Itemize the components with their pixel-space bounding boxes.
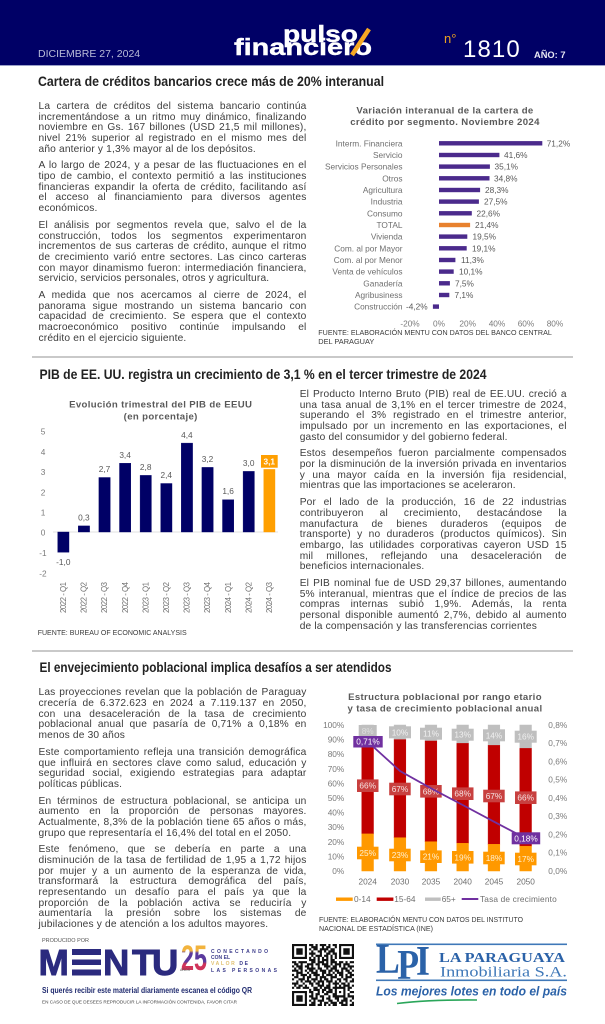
- left axis: 20%: [328, 837, 345, 847]
- chart title: [69, 400, 252, 422]
- value labels: -1,0: [56, 557, 71, 567]
- footer: La Paraguaya Inmobiliaria logo: Los mejores lotes en todo el país: [376, 984, 567, 998]
- right axis: 0,7%: [548, 738, 568, 748]
- 15-64 labels: 67%: [392, 784, 409, 794]
- value labels: 0,3: [78, 512, 90, 522]
- value labels: 27,5%: [484, 197, 508, 207]
- y axis: [39, 427, 47, 578]
- highlighted label: 3,1: [264, 456, 275, 466]
- quarter labels: 2022 - Q1: [59, 582, 68, 613]
- chart title: crédito por segmento. Noviembre 2024: [350, 117, 540, 128]
- 0-14 labels: 21%: [423, 852, 440, 862]
- left axis: 30%: [328, 822, 345, 832]
- left axis: 10%: [328, 851, 345, 861]
- footer: La Paraguaya Inmobiliaria logo: Inmobiliaria S.A.: [440, 965, 567, 981]
- logo: pulso financiero: financiero: [234, 34, 372, 60]
- chart title: Estructura poblacional por rango etario: [348, 692, 542, 703]
- source: [318, 328, 552, 346]
- footer: La Paraguaya Inmobiliaria logo: LA PARAGUAYA: [439, 951, 566, 966]
- tagline: VALOR DE: [211, 961, 249, 967]
- quarter labels: 2023 - Q3: [183, 582, 192, 613]
- category labels: Com. al por Mayor: [334, 243, 403, 253]
- 65+ labels: 11%: [423, 729, 440, 739]
- right axis: 0,1%: [548, 848, 568, 858]
- text block: envejecimiento poblacional: que influirá en sectores clave como salud, educación y: [38, 758, 306, 769]
- text block: envejecimiento poblacional: poblacional anual que pasaría de 0,71% a 0,18% en: [38, 719, 306, 730]
- text block: PIB EEUU: El PIB nominal fue de USD 29,37 billones, aumentando: [300, 578, 567, 589]
- value labels: 4,4: [181, 430, 193, 440]
- category labels: Venta de vehículos: [332, 267, 402, 277]
- text block: cartera de créditos: El análisis por segmentos revela que, salvo el de la: [38, 220, 306, 231]
- growth labels: 0,18%: [514, 833, 538, 843]
- text block: envejecimiento poblacional: Actualmente, 8,3% de la población tiene 65 años o más,: [38, 817, 306, 828]
- y axis: -1: [39, 548, 47, 558]
- 65+ labels: 16%: [517, 732, 535, 742]
- category labels: TOTAL: [377, 220, 403, 230]
- source: NACIONAL DE ESTADÍSTICA (INE): [319, 924, 433, 933]
- text block: envejecimiento poblacional: crecería de 6.372.623 en 2024 a 7.119.137 en 2050,: [38, 698, 306, 709]
- value labels: 41,6%: [504, 150, 528, 160]
- value labels: 3,0: [243, 458, 255, 468]
- source: [319, 915, 523, 933]
- text block: PIB EEUU: compras internas subió 1,9%. Además, la renta: [300, 599, 567, 610]
- quarter labels: 2024 - Q3: [265, 582, 274, 613]
- category labels: Otros: [382, 173, 402, 183]
- right axis: 0,3%: [548, 811, 568, 821]
- legend: Tasa de crecimiento: [480, 894, 557, 904]
- legend: 0-14: [354, 894, 371, 904]
- text block: cartera de créditos: tipo de cambio, el contexto permitió a las instituciones: [38, 171, 306, 182]
- category labels: [325, 138, 403, 312]
- text block: envejecimiento poblacional: disminución de la tasa de fertilidad de 1,95 a 1,72 hijos: [38, 855, 306, 866]
- chart title: Evolución trimestral del PIB de EEUU: [69, 400, 252, 410]
- value labels: 21,4%: [475, 220, 499, 230]
- text block: envejecimiento poblacional: Este comportamiento refleja una transición demográfica: [38, 747, 306, 758]
- bars: [58, 443, 275, 552]
- source: FUENTE: BUREAU OF ECONOMIC ANALYSIS: [38, 628, 187, 637]
- text block: envejecimiento poblacional: jubilaciones y de atención a los adultos mayores.: [38, 919, 268, 930]
- left axis: 40%: [328, 808, 345, 818]
- 65+ labels: [359, 725, 537, 743]
- 15-64 labels: [357, 779, 536, 804]
- quarter labels: 2022 - Q4: [121, 581, 130, 613]
- value labels: 2,8: [140, 462, 152, 472]
- value labels: [56, 430, 255, 567]
- 65+ labels: 14%: [486, 730, 503, 740]
- value axis: 60%: [518, 318, 535, 328]
- text block: PIB EEUU: y una mayor caída en la inversión fija residencial,: [300, 470, 567, 481]
- category labels: Interm. Financiera: [336, 138, 403, 148]
- quarter labels: [59, 581, 274, 613]
- text block: PIB EEUU: por la disminución de la inversión privada en inventarios: [300, 459, 567, 470]
- text block: envejecimiento poblacional: Este fenómeno, que se debería en parte a una: [38, 844, 306, 855]
- 0-14 labels: [357, 847, 536, 865]
- y axis: 5: [41, 427, 46, 437]
- category labels: Agricultura: [363, 185, 403, 195]
- text block: envejecimiento poblacional: [38, 687, 306, 930]
- legend: 15-64: [394, 894, 416, 904]
- category labels: Construcción: [354, 302, 403, 312]
- value labels: 11,3%: [461, 255, 485, 265]
- text block: cartera de créditos: incrementos de sus carteras de crédito, aunque el ritmo: [38, 241, 306, 252]
- value labels: 7,5%: [455, 278, 475, 288]
- footer: producer logo: [38, 938, 278, 1004]
- text block: PIB EEUU: una tasa anual de 3,1% en el tercer trimestre de 2024,: [300, 400, 567, 411]
- footer: La Paraguaya Inmobiliaria logo: [376, 942, 567, 1004]
- left axis: 90%: [328, 735, 345, 745]
- quarter labels: 2023 - Q1: [141, 582, 150, 613]
- issue number: n°: [444, 31, 456, 46]
- chart title: [348, 692, 542, 715]
- left axis: 0%: [332, 866, 345, 876]
- year labels: 2045: [485, 877, 504, 887]
- value labels: 1,6: [222, 486, 234, 496]
- text block: cartera de créditos: incrementándose a un ritmo muy dinámico, finalizando: [38, 112, 306, 123]
- right axis: 0,5%: [548, 775, 568, 785]
- y axis: 2: [41, 487, 46, 497]
- value labels: 3,4: [119, 450, 131, 460]
- source: FUENTE: ELABORACIÓN MENTU CON DATOS DEL BANCO CENTRAL: [318, 328, 552, 337]
- text block: cartera de créditos: construcción, todos los segmentos experimentaron: [38, 231, 306, 242]
- text block: PIB EEUU: Por el lado de la producción, 16 de 22 industrias: [300, 497, 567, 508]
- text block: cartera de créditos: con mayor dinamismo fueron: intermediación financiera,: [38, 263, 306, 274]
- text block: envejecimiento poblacional: políticas públicas.: [38, 779, 122, 790]
- quarter labels: 2022 - Q3: [100, 582, 109, 613]
- category labels: Ganadería: [363, 278, 403, 288]
- QR code: [292, 944, 354, 1006]
- text block: PIB EEUU: de la compensación y las transferencias corrientes: [300, 621, 537, 632]
- 65+ bars: [362, 725, 532, 748]
- value labels: 35,1%: [494, 162, 519, 172]
- text block: cartera de créditos: servicio, servicios personales, otros y agricultura.: [38, 273, 269, 284]
- 0-14 labels: 17%: [517, 854, 535, 864]
- growth labels: [353, 736, 540, 844]
- text block: PIB EEUU: mientras que las importaciones se aceleraron.: [300, 480, 516, 491]
- tagline: CONECTANDO: [211, 949, 268, 955]
- tagline: LAS PERSONAS: [211, 968, 278, 974]
- 15-64 labels: 66%: [359, 781, 377, 791]
- text block: envejecimiento poblacional: por mujer y a un aumento de la esperanza de vida,: [38, 866, 306, 877]
- y axis: 3: [41, 467, 46, 477]
- category labels: Com. al por Menor: [334, 255, 403, 265]
- value labels: 34,8%: [494, 173, 518, 183]
- left axis: 80%: [328, 749, 345, 759]
- growth rate line: [368, 742, 526, 838]
- right axis: 0,2%: [548, 830, 568, 840]
- text block: envejecimiento poblacional: proporción de la población activa se reduciría y: [38, 898, 306, 909]
- year labels: 2024: [358, 877, 377, 887]
- text block: PIB EEUU: mil millones, reflejando una desaceleración de: [300, 551, 567, 562]
- left axis: 60%: [328, 778, 345, 788]
- bar chart: cartera por segmento: [318, 106, 571, 346]
- logo: pulso financiero: [234, 21, 372, 60]
- quarter labels: 2023 - Q4: [203, 581, 212, 613]
- tagline: [211, 949, 278, 974]
- right axis: [548, 720, 568, 876]
- 0-14 bars: [362, 834, 532, 871]
- logo: pulso financiero: pulso: [283, 21, 358, 47]
- 0-14 labels: 25%: [359, 848, 377, 858]
- left axis: 100%: [323, 720, 345, 730]
- text block: envejecimiento poblacional: menos de 30 años: [38, 730, 125, 741]
- text block: envejecimiento poblacional: transformará la estructura demográfica del país,: [38, 876, 306, 887]
- value axis: [400, 318, 564, 328]
- 15-64 labels: 67%: [486, 791, 503, 801]
- year labels: 2035: [422, 877, 441, 887]
- chart title: Variación interanual de la cartera de: [356, 106, 534, 116]
- value labels: 7,1%: [454, 290, 474, 300]
- growth labels: 0,71%: [356, 737, 380, 747]
- value labels: 28,3%: [485, 185, 509, 195]
- text block: cartera de créditos: noviembre en Gs. 167 billones (USD 21,5 mil millones),: [38, 122, 306, 133]
- value labels: 3,2: [202, 454, 214, 464]
- text block: cartera de créditos: crédito en el ejercicio siguiente.: [38, 333, 186, 344]
- year labels: 2040: [453, 877, 472, 887]
- text block: cartera de créditos: capacidad de crecimiento. Se espera que el contexto: [38, 311, 306, 322]
- text block: cartera de créditos: año anterior y 1,3% mayor al de los depósitos.: [38, 144, 256, 155]
- text block: envejecimiento poblacional: aumentaría la presión sobre los sistemas de: [38, 908, 306, 919]
- 0-14 labels: 23%: [392, 850, 409, 860]
- value axis: 0%: [433, 318, 446, 328]
- category labels: Agribusiness: [355, 290, 402, 300]
- text block: cartera de créditos: financieras expandir la oferta de crédito, facilitando así: [38, 182, 306, 193]
- text block: PIB EEUU: contribuyeron al crecimiento, destacándose la: [300, 508, 567, 519]
- value labels: 19,5%: [472, 232, 497, 242]
- year labels: 2030: [391, 877, 410, 887]
- quarter labels: 2024 - Q2: [244, 582, 253, 613]
- 15-64 labels: 68%: [454, 789, 472, 799]
- year labels: 2050: [516, 877, 535, 887]
- text block: cartera de créditos: A lo largo de 2024, y a pesar de las fluctuaciones en el: [38, 160, 306, 171]
- footer: producer logo: EN CASO DE QUE DESEES REPRODUCIR LA INFORMACIÓN CONTENIDA, FAVOR CITAR: [42, 998, 238, 1004]
- left axis: 70%: [328, 764, 345, 774]
- text block: envejecimiento poblacional: grupo que representaría el 16,4% del total en el 2050.: [38, 828, 291, 839]
- chart title: (en porcentaje): [124, 412, 198, 422]
- text block: PIB EEUU: manufactura de bienes duraderos (equipos de: [300, 519, 567, 530]
- legend: [336, 894, 557, 904]
- y axis: 0: [41, 528, 46, 538]
- text block: PIB EEUU: Estos desempeños fueron parcialmente compensados: [300, 448, 567, 459]
- category labels: Consumo: [367, 208, 403, 218]
- highlighted label: [261, 455, 278, 468]
- category labels: Vivienda: [371, 232, 403, 242]
- footer: producer logo: Si querés recibir este material diariamente escanea el código QR: [42, 986, 252, 995]
- text block: cartera de créditos: nivel 21% superior al registrado en el mismo mes del: [38, 133, 306, 144]
- text block: envejecimiento poblacional: seguridad social, exigiendo estrategias para adaptar: [38, 768, 306, 779]
- 15-64 labels: 68%: [423, 786, 440, 796]
- stacked chart: estructura poblacional: [319, 692, 568, 933]
- text block: cartera de créditos: de crecimiento varió entre sectores. Las cinco carteras: [38, 252, 306, 263]
- text block: cartera de créditos: panorama sigue mostrando un sistema bancario con: [38, 301, 306, 312]
- footer: producer logo: AÑOS: [180, 967, 191, 972]
- right axis: 0,0%: [548, 866, 568, 876]
- value labels: 2,7: [99, 464, 111, 474]
- value labels: 71,2%: [547, 138, 571, 148]
- right axis: 0,6%: [548, 756, 568, 766]
- 25 years mark: 25: [181, 939, 207, 978]
- 0-14 labels: 19%: [454, 852, 472, 862]
- 65+ labels: 10%: [392, 727, 409, 737]
- text block: PIB EEUU: personal disponible aumentó 2,7%, debido al aumento: [300, 610, 567, 621]
- left axis: 50%: [328, 793, 345, 803]
- source: DEL PARAGUAY: [318, 337, 374, 346]
- value axis: 20%: [459, 318, 477, 328]
- text block: PIB EEUU: gasto del consumidor y del gobierno federal.: [300, 432, 508, 443]
- value labels: [406, 138, 571, 312]
- y axis: 4: [41, 447, 46, 457]
- text block: cartera de créditos: económicos.: [38, 203, 98, 214]
- text block: cartera de créditos: La cartera de créditos del sistema bancario continúa: [38, 101, 306, 112]
- issue number: 1810: [463, 36, 521, 63]
- 0-14 labels: 18%: [486, 853, 503, 863]
- text block: envejecimiento poblacional: con una desaceleración de la tasa de crecimiento: [38, 709, 306, 720]
- 65+ labels: 8%: [362, 726, 374, 736]
- value labels: -4,2%: [406, 302, 428, 312]
- value axis: 40%: [489, 318, 506, 328]
- 15-64 labels: 66%: [517, 793, 535, 803]
- text block: cartera de créditos: [38, 101, 306, 344]
- 65+ labels: 13%: [454, 730, 472, 740]
- y axis: 1: [41, 508, 46, 518]
- MENTU wordmark: MENTU: [38, 942, 178, 983]
- text block: PIB EEUU: [300, 389, 567, 632]
- issue number: [444, 31, 566, 63]
- text block: cartera de créditos: el acceso al financiamiento para diversos agentes: [38, 192, 306, 203]
- quarter labels: 2024 - Q1: [224, 582, 233, 613]
- text block: PIB EEUU: beneficios internacionales.: [300, 561, 424, 572]
- header band: [0, 0, 605, 66]
- value labels: 19,1%: [472, 243, 496, 253]
- date: DICIEMBRE 27, 2024: [38, 48, 140, 60]
- source: FUENTE: ELABORACIÓN MENTU CON DATOS DEL INSTITUTO: [319, 915, 523, 924]
- issue number: AÑO: 7: [534, 50, 566, 60]
- text block: envejecimiento poblacional: Las proyecciones revelan que la población de Paraguay: [38, 687, 306, 698]
- chart title: [350, 106, 540, 128]
- value axis: -20%: [400, 318, 420, 328]
- text block: envejecimiento poblacional: En términos de estructura poblacional, se anticipa un: [38, 796, 306, 807]
- value labels: 22,6%: [476, 208, 501, 218]
- chart title: y tasa de crecimiento poblacional anual: [348, 704, 542, 715]
- value labels: 10,1%: [459, 267, 483, 277]
- quarter labels: 2023 - Q2: [162, 582, 171, 613]
- tagline: CON EL: [211, 955, 230, 961]
- footer: producer logo: PRODUCIDO POR: [42, 938, 89, 944]
- category labels: Servicios Personales: [325, 162, 402, 172]
- year labels: [358, 877, 535, 887]
- text block: PIB EEUU: 5% interanual, mientras que el índice de precios de las: [300, 589, 567, 600]
- right axis: 0,8%: [548, 720, 568, 730]
- column chart: PIB EEUU: [38, 400, 278, 637]
- text block: cartera de créditos: A medida que nos acercamos al cierre de 2024, el: [38, 290, 306, 301]
- left axis: [323, 720, 345, 876]
- right axis: 0,4%: [548, 793, 568, 803]
- text block: PIB EEUU: impulsado por un incremento en las exportaciones, el: [300, 421, 567, 432]
- bars: [433, 141, 542, 309]
- text block: cartera de créditos: macroeconómico positivo continúe impulsando el: [38, 322, 306, 333]
- text block: envejecimiento poblacional: representando un desafío para el país ya que la: [38, 887, 306, 898]
- value labels: 2,4: [161, 470, 172, 480]
- text block: PIB EEUU: transporte) y no duraderos (productos químicos). Sin: [300, 529, 567, 540]
- value axis: 80%: [547, 318, 564, 328]
- 15-64 bars: [362, 737, 532, 846]
- text block: envejecimiento poblacional: aumento en la proporción de personas mayores.: [38, 806, 306, 817]
- category labels: Servicio: [373, 150, 403, 160]
- text block: PIB EEUU: superando el 3% registrado en el trimestre anterior,: [300, 410, 567, 421]
- y axis: -2: [39, 568, 47, 578]
- text block: PIB EEUU: El Producto Interno Bruto (PIB) real de EE.UU. creció a: [300, 389, 567, 400]
- legend: 65+: [442, 894, 456, 904]
- text block: PIB EEUU: embargo, las utilidades corporativas cayeron USD 15: [300, 540, 567, 551]
- category labels: Industria: [371, 197, 403, 207]
- quarter labels: 2022 - Q2: [80, 582, 89, 613]
